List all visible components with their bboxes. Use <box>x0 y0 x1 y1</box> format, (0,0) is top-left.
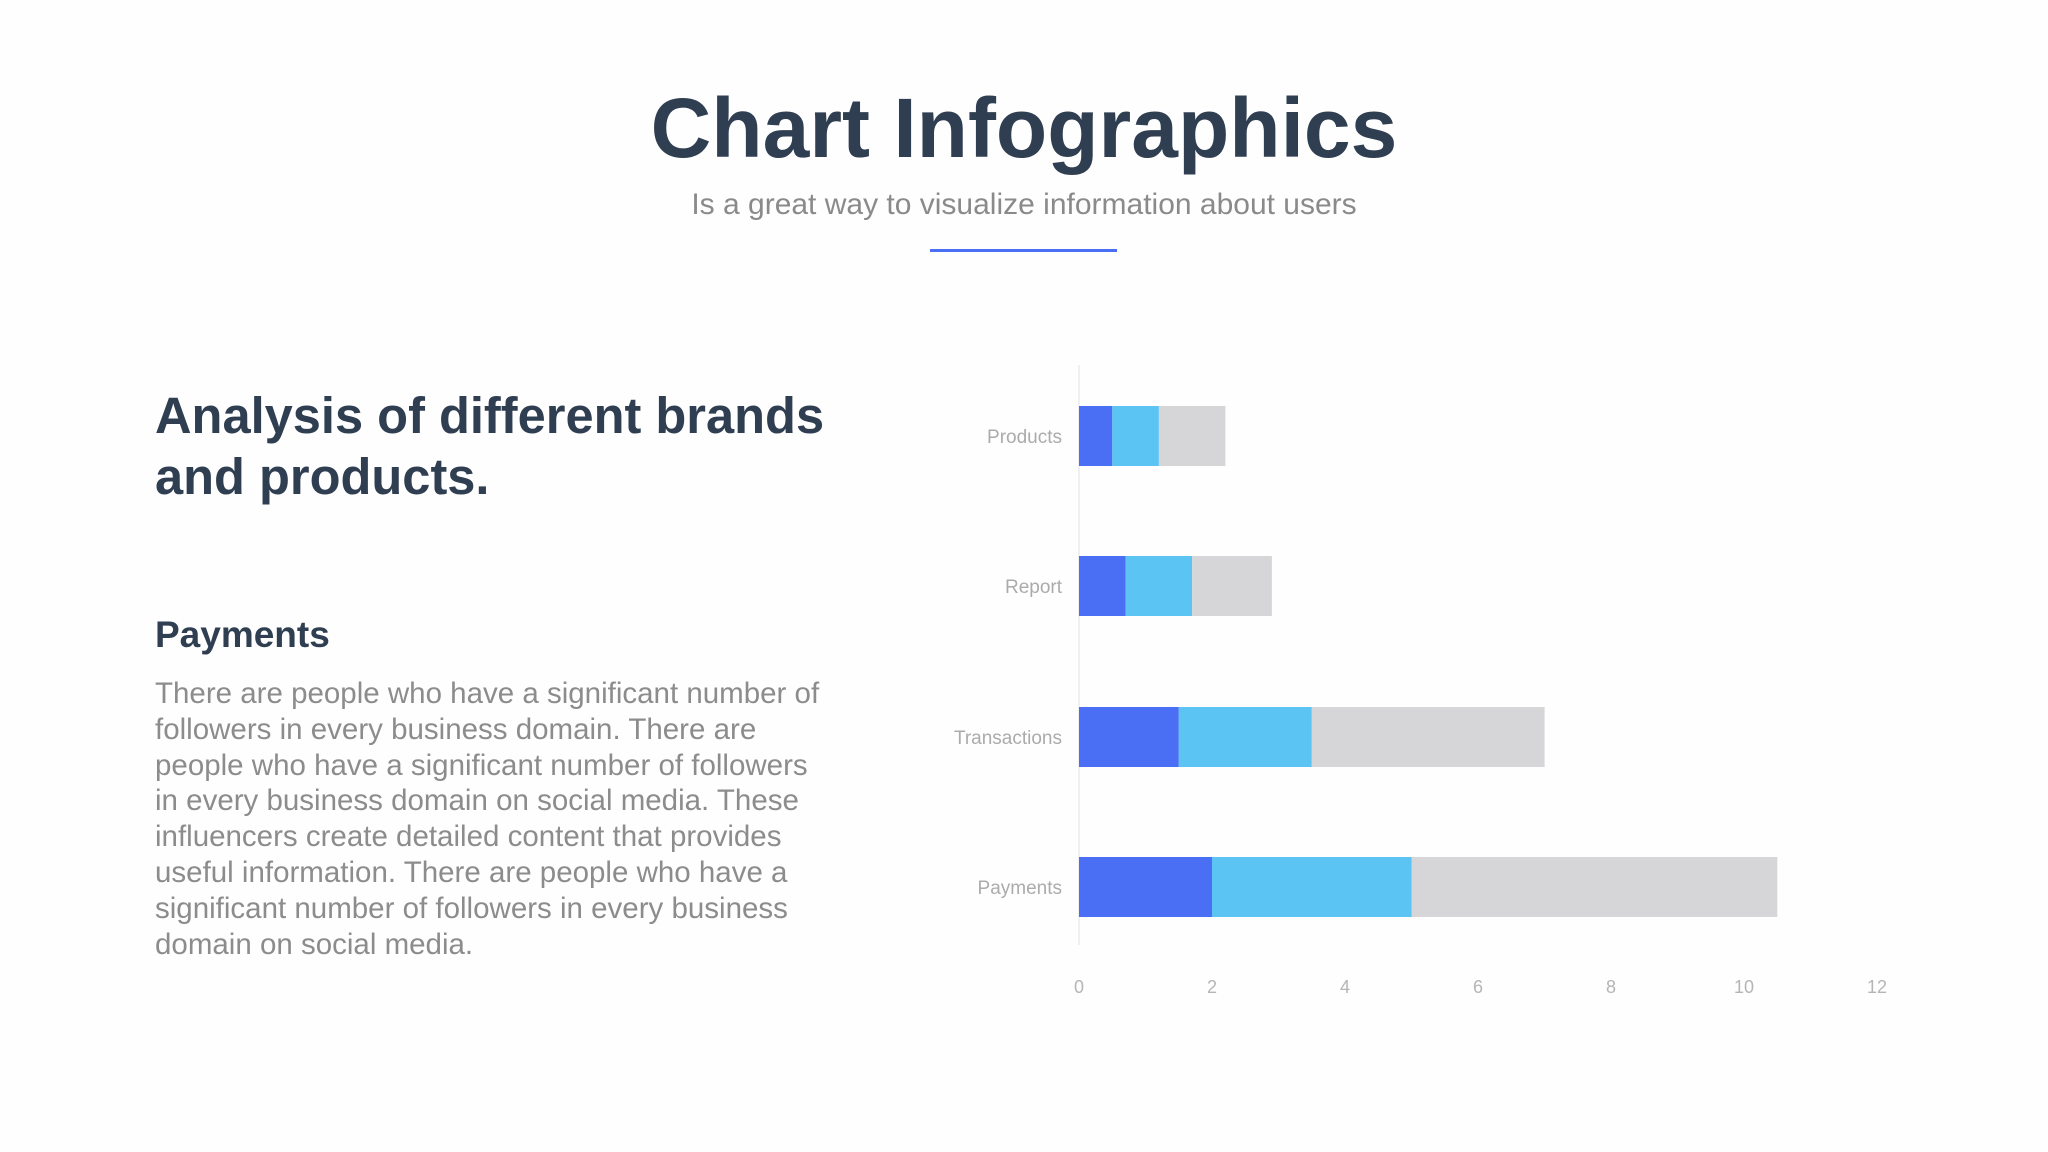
body text: There are people who have a significant number of <box>155 677 819 710</box>
bar: Products <box>987 406 1225 466</box>
x axis labels <box>1074 977 1887 997</box>
subtitle: Is a great way to visualize information about users <box>691 188 1357 221</box>
bar: Report: Report <box>1005 577 1063 598</box>
accent underline <box>930 249 1117 252</box>
x axis labels: 0 <box>1074 977 1084 997</box>
body text: people who have a significant number of followers <box>155 749 808 782</box>
x axis labels: 2 <box>1207 977 1217 997</box>
body text: useful information. There are people who have a <box>155 856 787 889</box>
x axis labels: 8 <box>1606 977 1616 997</box>
x axis labels: 12 <box>1867 977 1887 997</box>
body text: significant number of followers in every business <box>155 892 788 925</box>
body text: influencers create detailed content that provides <box>155 820 781 853</box>
bar: Transactions: Transactions <box>954 728 1062 749</box>
heading: and products. <box>155 448 490 505</box>
heading <box>155 387 824 505</box>
subheading: payments: Payments <box>155 614 330 655</box>
x axis labels: 4 <box>1340 977 1350 997</box>
body text: followers in every business domain. There are <box>155 713 756 746</box>
x axis labels: 10 <box>1734 977 1754 997</box>
title: Chart Infographics <box>651 81 1397 175</box>
body text <box>155 677 820 961</box>
bar: Payments: Payments <box>978 878 1062 899</box>
bar: Payments <box>978 857 1777 917</box>
bar: Transactions <box>954 707 1545 767</box>
x axis labels: 6 <box>1473 977 1483 997</box>
body text: domain on social media. <box>155 928 473 961</box>
bar: Report <box>1005 556 1272 616</box>
body text: in every business domain on social media. These <box>155 784 799 817</box>
bar: Products: Products <box>987 427 1062 448</box>
heading: Analysis of different brands <box>155 387 824 444</box>
